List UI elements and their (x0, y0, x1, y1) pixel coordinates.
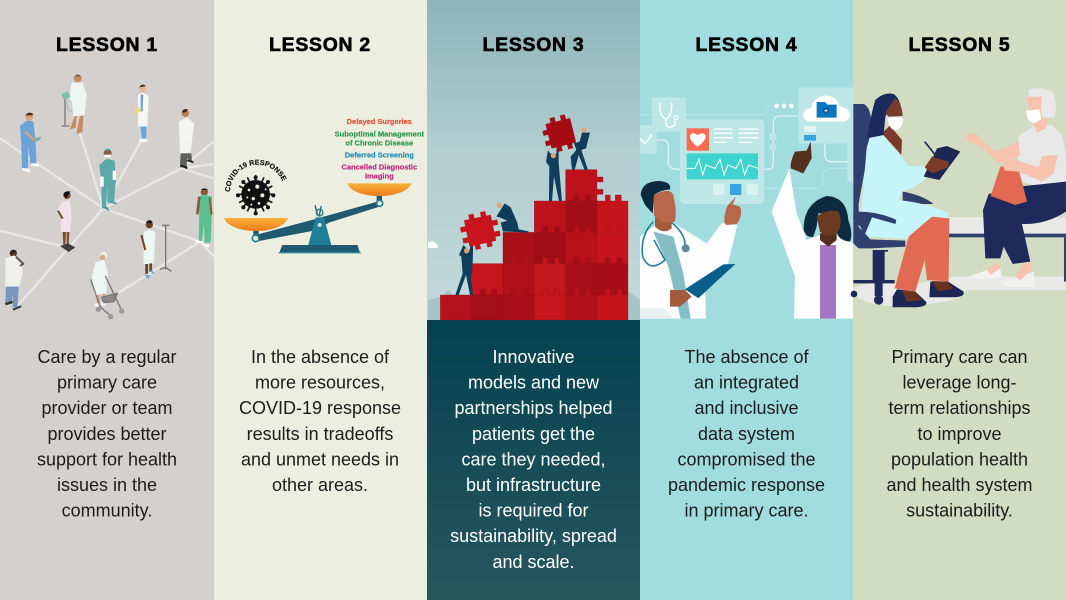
text: lesson 3 body: partnerships helped (454, 398, 613, 418)
dashboard (680, 119, 764, 204)
label: suboptimal management: Suboptimal Management (335, 130, 424, 139)
label: covid-19 response (230, 165, 285, 192)
panel: lesson 5 (851, 0, 1066, 600)
text: lesson 2 body: and unmet needs in (241, 449, 399, 469)
text: lesson 5 body: and health system (886, 475, 1033, 495)
chair (851, 104, 934, 305)
heart icon (687, 128, 709, 151)
text: lesson 4 body: data system (698, 424, 795, 444)
text: lesson 5 body: Primary care can (891, 347, 1028, 367)
card: stethoscope (652, 97, 686, 132)
heading: lesson 5: LESSON 5 (909, 34, 1010, 56)
heading: lesson 2: LESSON 2 (269, 34, 371, 56)
dots (774, 104, 794, 108)
text: lesson 3 body: Innovative (492, 347, 575, 367)
person: patient with monitor (61, 74, 87, 134)
text: lesson 3 body: patients get the (472, 424, 595, 444)
figure: bottom left worker (455, 239, 473, 295)
illustration: doctor and patient (851, 88, 1066, 307)
person: green scrubs (195, 188, 213, 248)
doctor: female raising hand (772, 142, 854, 319)
floor and bench (853, 217, 1066, 306)
text: lesson 2 body: results in tradeoffs (247, 424, 393, 444)
text: lesson 1 body: issues in the (57, 475, 157, 495)
puzzle blocks (440, 170, 628, 320)
person: doctor with notes (135, 85, 149, 142)
doctor: male with clipboard (640, 181, 741, 319)
heading: lesson 3: LESSON 3 (483, 34, 584, 56)
person: scientist at microscope (5, 250, 24, 311)
seated patient (965, 88, 1066, 287)
heading: lesson 4: LESSON 4 (696, 34, 797, 56)
text: lesson 2 body: more resources, (255, 373, 385, 393)
text: lesson 3 body: but infrastructure (466, 475, 601, 495)
text: lesson 3 body: and scale. (492, 552, 575, 572)
person: patient with iv pole (141, 220, 171, 279)
icon: coronavirus (236, 175, 275, 215)
text: lesson 4 body: and inclusive (694, 398, 799, 418)
text: lesson 2 body: In the absence of (251, 347, 390, 367)
figure: upper right worker (571, 133, 590, 170)
heading: lesson 1: LESSON 1 (56, 34, 158, 56)
card: left chart (640, 125, 657, 154)
text: lesson 5 body: term relationships (888, 398, 1031, 418)
panel: lesson 1 (0, 0, 214, 600)
text: lesson 5 body: population health (891, 449, 1028, 469)
text: lesson 1 body: support for health (37, 449, 177, 469)
label: cancelled diagnostic imaging: Cancelled Diagnostic (341, 163, 417, 172)
text: lesson 2 body: COVID-19 response (239, 398, 401, 418)
panel: lesson 2 (214, 0, 427, 600)
panel: lesson 4 (640, 0, 854, 600)
person: doctor in white coat (179, 109, 194, 169)
person: surgeon (99, 149, 118, 211)
connector lines (657, 116, 848, 169)
left pan (224, 218, 288, 231)
label: cancelled diagnostic imaging: Imaging (365, 172, 394, 181)
figure: kneeling worker (496, 203, 529, 233)
person: patient in pink (57, 191, 75, 252)
person: blue scrubs (20, 113, 42, 173)
text: lesson 5 body: to improve (917, 424, 1002, 444)
right pan (347, 183, 411, 196)
figures: workers (455, 133, 590, 295)
text: lesson 1 body: provider or team (41, 398, 173, 418)
text: lesson 1 body: community. (62, 501, 152, 521)
text: lesson 3 body: models and new (468, 373, 600, 393)
figure: upper left worker (546, 143, 562, 201)
puzzle piece: top (540, 113, 577, 154)
text: lesson 4 body: an integrated (694, 373, 799, 393)
label: suboptimal management: of Chronic Disease (345, 138, 413, 147)
puzzle piece: lower (458, 209, 502, 252)
panel: lesson 3 (427, 0, 641, 600)
text: lesson 5 body: sustainability. (906, 501, 1013, 521)
text: lesson 2 body: other areas. (272, 475, 368, 495)
text: lesson 1 body: primary care (57, 373, 157, 393)
text: lesson 1 body: Care by a regular (37, 347, 177, 367)
text: lesson 4 body: compromised the (677, 449, 816, 469)
text: lesson 4 body: pandemic response (668, 475, 825, 495)
text: lesson 3 body: is required for (478, 501, 589, 521)
seated doctor (853, 93, 964, 307)
illustration: network of care providers (0, 74, 214, 319)
illustration: puzzle staircase (428, 113, 641, 320)
illustration: balance scale: COVID-19 RESPONSE (225, 160, 287, 192)
illustration: balance scale (224, 117, 424, 254)
scale base and stand (252, 196, 383, 253)
card: cloud folder (798, 87, 854, 143)
person: patient with walker (91, 252, 124, 319)
text: lesson 4 body: in primary care. (684, 501, 809, 521)
label: delayed surgeries: Delayed Surgeries (347, 117, 412, 126)
text: lesson 3 body: sustainability, spread (450, 526, 617, 546)
card: right edge (847, 139, 854, 182)
text: lesson 3 body: care they needed, (461, 449, 606, 469)
label: deferred screening: Deferred Screening (345, 151, 414, 160)
text: lesson 4 body: The absence of (684, 347, 810, 367)
illustration: digital health data (640, 87, 854, 319)
text: lesson 5 body: leverage long- (902, 373, 1017, 393)
ecg monitor (687, 153, 758, 179)
text: lesson 1 body: provides better (47, 424, 167, 444)
